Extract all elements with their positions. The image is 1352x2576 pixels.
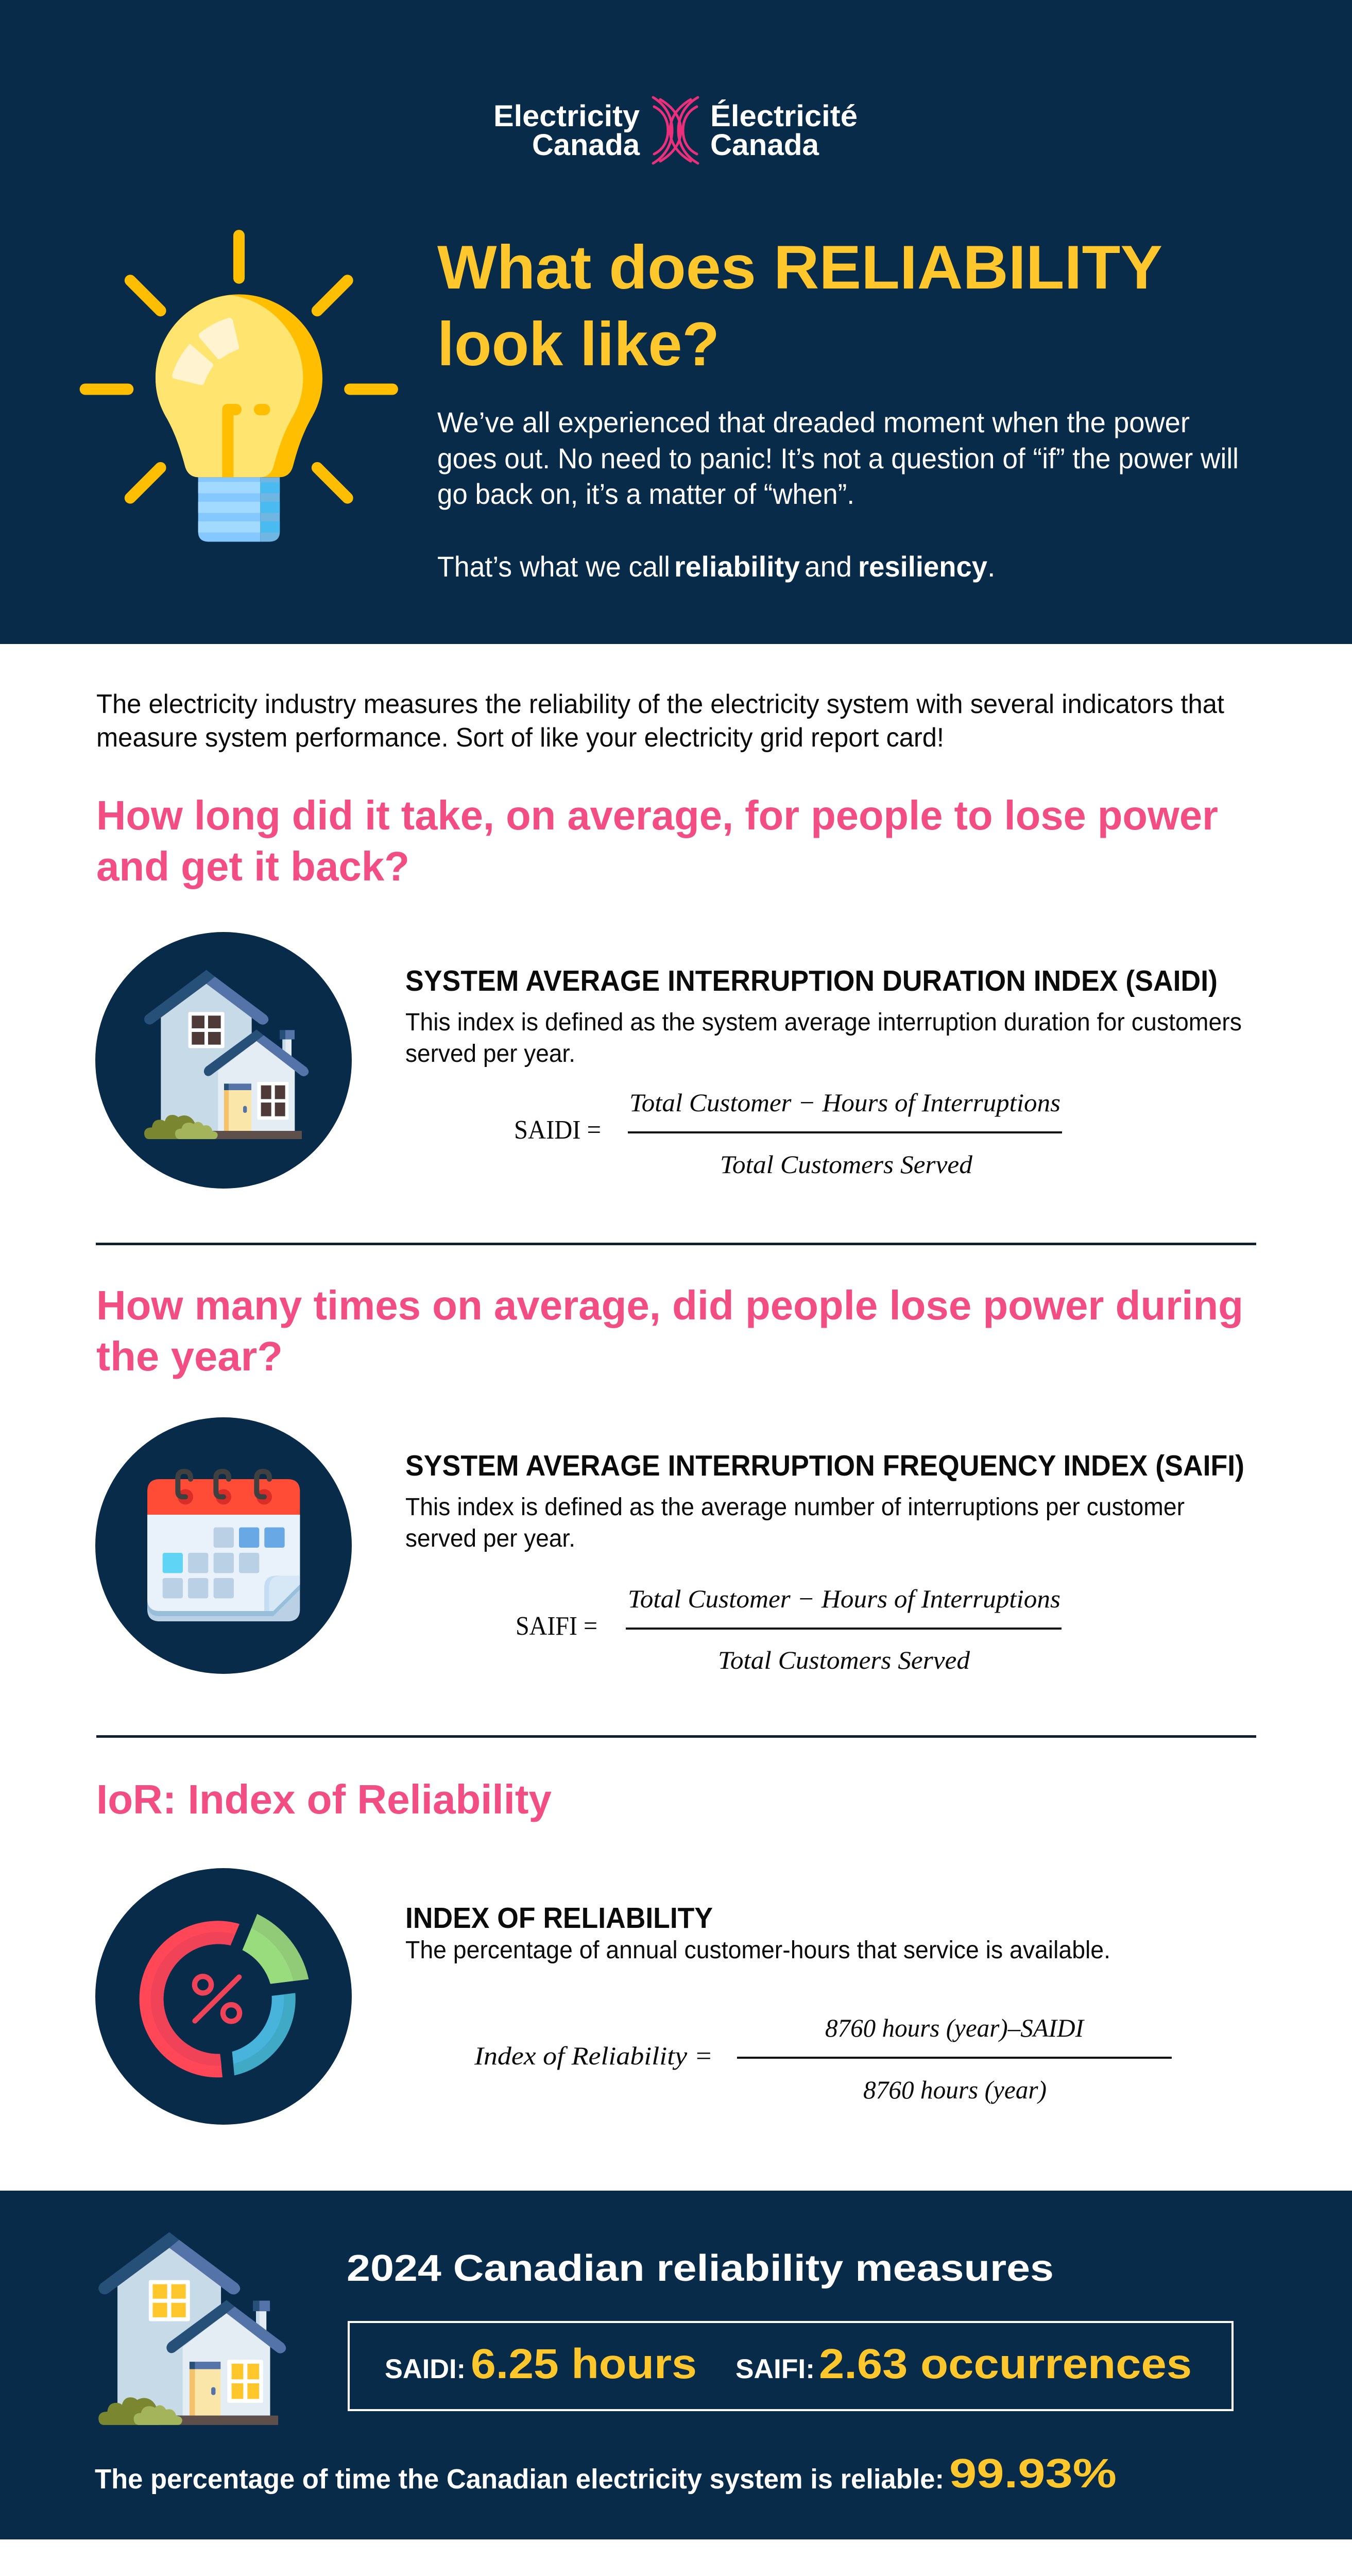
formula: SAIDI: Total Customer − Hours of Interruptions (629, 1088, 1060, 1117)
panel: SAIFI (95, 1282, 1244, 1674)
icon: donut chart in circle (95, 1868, 352, 2125)
logo: Electricity Canada: Canada (532, 128, 640, 162)
text block: SAIFI definition: served per year. (405, 1525, 575, 1552)
title (437, 233, 1162, 379)
text block: SAIDI definition: This index is defined as the system average interruption duration for customers (405, 1009, 1242, 1036)
heading: how long: How long did it take, on average, for people to lose power (96, 792, 1218, 838)
heading: IoR: IoR: Index of Reliability (96, 1776, 552, 1822)
callout: SAIDI and SAIFI values: 2.63 occurrences (819, 2341, 1192, 2387)
formula: IoR: 8760 hours (year)–SAIDI (825, 2013, 1085, 2042)
text block: SAIDI definition: served per year. (405, 1040, 575, 1067)
logo: Electricity Canada: Electricity (493, 99, 640, 133)
formula: SAIFI: Total Customers Served (718, 1646, 970, 1674)
text block: IoR definition (405, 1902, 1110, 1964)
formula: SAIDI: SAIDI = (514, 1115, 601, 1145)
heading: 2024 measures: 2024 Canadian reliability measures (347, 2248, 1054, 2289)
formula: SAIFI (516, 1584, 1062, 1674)
text block: industry intro (96, 689, 1225, 753)
title: look like? (437, 310, 720, 379)
panel: 2024 Canadian reliability measures (0, 2191, 1352, 2539)
formula: IoR (474, 2013, 1172, 2104)
heading: how many times (96, 1282, 1243, 1379)
text block: SAIDI definition: SYSTEM AVERAGE INTERRUPTION DURATION INDEX (SAIDI) (405, 964, 1218, 997)
text block: SAIFI definition: SYSTEM AVERAGE INTERRUPTION FREQUENCY INDEX (SAIFI) (405, 1449, 1244, 1482)
text block: SAIDI definition (405, 964, 1242, 1067)
text block: intro (437, 406, 1239, 583)
icon: house in circle (95, 932, 352, 1189)
text block: intro: and (805, 550, 852, 583)
logo: Electricity Canada: Canada (710, 128, 819, 162)
text block: SAIFI definition (405, 1449, 1244, 1552)
text block: SAIFI definition: This index is defined as the average number of interruptions per customer (405, 1494, 1185, 1521)
text block: intro: That’s what we call (437, 550, 670, 583)
panel: header (0, 0, 1352, 644)
text block: industry intro: The electricity industry measures the reliability of the electricity system with several indicators that (96, 689, 1225, 719)
panel: index of reliability (95, 1776, 1172, 2125)
text block: IoR definition: INDEX OF RELIABILITY (405, 1902, 713, 1935)
formula: IoR: 8760 hours (year) (863, 2075, 1047, 2104)
callout: SAIDI and SAIFI values: SAIFI: (735, 2354, 815, 2384)
title: What does RELIABILITY (437, 233, 1162, 302)
text block: intro: . (987, 550, 996, 583)
icon: light bulb (85, 235, 392, 542)
callout: percentage reliable: The percentage of time the Canadian electricity system is reliable: (95, 2464, 944, 2495)
text block: intro: go back on, it’s a matter of “when”. (437, 478, 854, 510)
text block: intro: reliability (674, 550, 800, 583)
text block: intro: We’ve all experienced that dreaded moment when the power (437, 406, 1190, 438)
icon: house with lit windows (98, 2232, 286, 2425)
heading: how many times: the year? (96, 1333, 283, 1379)
text block: IoR definition: The percentage of annual customer-hours that service is available. (405, 1937, 1110, 1964)
heading: how long (96, 792, 1218, 889)
icon: calendar in circle (95, 1417, 352, 1674)
formula: SAIDI (514, 1088, 1062, 1179)
formula: SAIFI: Total Customer − Hours of Interruptions (628, 1584, 1060, 1613)
logo: Electricity Canada: Électricité (710, 99, 858, 133)
callout: percentage reliable (95, 2450, 1117, 2496)
callout: percentage reliable: 99.93% (949, 2450, 1117, 2496)
callout: SAIDI and SAIFI values: 6.25 hours (471, 2341, 697, 2387)
text block: intro: resiliency (858, 550, 987, 583)
text block: industry intro: measure system performance. Sort of like your electricity grid report card! (96, 723, 944, 753)
formula: SAIDI: Total Customers Served (720, 1150, 973, 1179)
formula: IoR: Index of Reliability = (474, 2041, 713, 2070)
panel: SAIDI (95, 792, 1242, 1189)
formula: SAIFI: SAIFI = (516, 1612, 597, 1641)
text block: intro: goes out. No need to panic! It’s not a question of “if” the power will (437, 442, 1239, 474)
callout: SAIDI and SAIFI values (349, 2322, 1233, 2410)
heading: how many times: How many times on average, did people lose power during (96, 1282, 1243, 1328)
callout: SAIDI and SAIFI values: SAIDI: (385, 2354, 466, 2384)
logo: Electricity Canada (493, 97, 858, 163)
heading: how long: and get it back? (96, 843, 409, 889)
